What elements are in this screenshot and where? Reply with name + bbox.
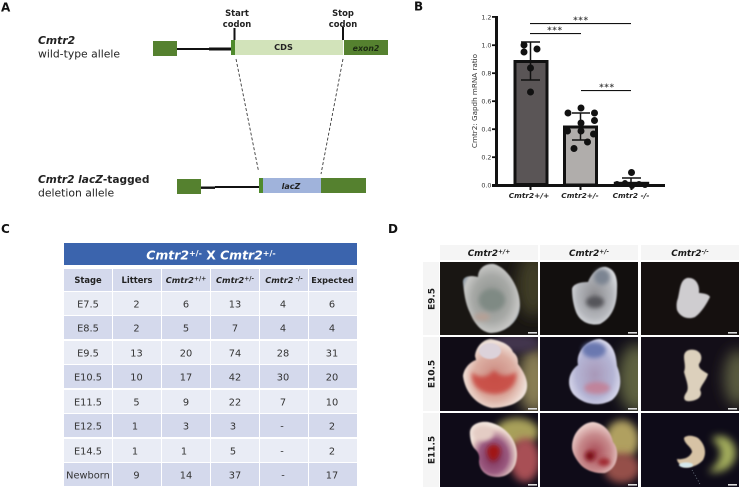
table body values: - <box>281 470 285 482</box>
row headers: E9.5 <box>428 288 438 310</box>
significance stars: *** <box>573 15 589 25</box>
table body values: E14.5 <box>74 446 102 458</box>
table body values: 5 <box>230 446 236 458</box>
row headers: E11.5 <box>428 436 438 464</box>
label: stop codon: Stop <box>332 8 354 18</box>
significance brackets <box>530 23 631 91</box>
panel letter C: C <box>1 222 10 236</box>
table body values: 7 <box>280 398 286 408</box>
deletion allele diagram <box>177 178 366 194</box>
table body values: 30 <box>277 372 289 384</box>
label: lacZ-tagged deletion allele: deletion allele <box>38 186 115 200</box>
table title bar <box>64 243 357 265</box>
panel letter A: A <box>1 0 11 14</box>
photo: E11.5 wild type <box>440 413 540 487</box>
table body values: 4 <box>280 300 286 310</box>
table body values: 2 <box>133 324 140 334</box>
table body values: 9 <box>133 470 140 482</box>
table column headers: Expected <box>311 275 354 285</box>
table body values: 10 <box>326 398 338 408</box>
table title bar: +/- <box>189 249 202 258</box>
table body values: 7 <box>232 324 238 334</box>
table title bar: +/- <box>263 249 276 258</box>
table body values: 10 <box>130 372 143 384</box>
table body values: Newborn <box>66 470 110 482</box>
table body values: E8.5 <box>77 324 99 334</box>
wild-type gene diagram: CDS <box>274 42 293 52</box>
bar: Cmtr2+/+ <box>515 62 547 184</box>
table body values: E9.5 <box>77 348 99 360</box>
column headers: +/+ <box>498 248 510 256</box>
photo: E9.5 null <box>641 262 739 335</box>
label: wild-type allele: Cmtr2 <box>38 34 75 47</box>
panel B: bar chart <box>414 0 665 200</box>
y axis with ticks: 0.6 <box>481 98 492 106</box>
table column headers: Cmtr2 <box>265 275 294 285</box>
table body values: E7.5 <box>77 300 99 310</box>
panel C: genotype table <box>1 222 357 486</box>
significance stars <box>547 15 615 92</box>
x axis labels: Cmtr2+/- <box>561 191 599 200</box>
label: wild-type allele: wild-type allele <box>38 48 120 60</box>
y axis with ticks <box>481 14 498 190</box>
table body values: 1 <box>132 446 138 458</box>
row headers: E10.5 <box>428 360 438 388</box>
table body values: 3 <box>230 422 236 432</box>
y axis title: Cmtr2: Gapdh mRNA ratio <box>470 54 479 148</box>
y axis with ticks: 0.2 <box>481 154 492 162</box>
x axis labels: Cmtr2 -/- <box>613 191 649 200</box>
table body values: 13 <box>229 300 241 310</box>
table body values: 1 <box>132 422 138 432</box>
label: start codon: Start <box>225 8 249 18</box>
x axis <box>492 184 665 190</box>
table body values: 6 <box>329 300 335 310</box>
x axis labels <box>509 191 649 200</box>
y axis with ticks: 1.0 <box>481 42 492 50</box>
table body values: - <box>280 446 284 458</box>
photo: E10.5 wild type <box>440 337 538 411</box>
table column headers: -/- <box>293 276 303 282</box>
table title bar: X <box>202 248 220 262</box>
table title bar: Cmtr2 <box>220 248 263 262</box>
wild-type gene diagram: exon2 <box>353 44 379 53</box>
wild-type gene diagram <box>153 27 388 56</box>
table body values: 5 <box>133 398 140 408</box>
table column headers: Litters <box>121 275 153 285</box>
photo: E10.5 null <box>641 337 740 411</box>
label: lacZ-tagged deletion allele: Cmtr2 lacZ-tagged <box>38 174 149 186</box>
table body values: E11.5 <box>74 398 102 408</box>
photo: E10.5 heterozygote <box>540 337 638 411</box>
deletion allele diagram: lacZ <box>282 182 301 191</box>
table body values: 22 <box>229 398 241 408</box>
y axis with ticks: 0.4 <box>481 126 492 134</box>
table body values: E12.5 <box>74 422 102 432</box>
table body values: 28 <box>277 348 289 360</box>
data points <box>520 42 648 189</box>
column headers: Cmtr2 <box>468 249 498 259</box>
significance stars: *** <box>547 25 563 35</box>
bar: Cmtr2+/- <box>564 127 596 185</box>
table body values <box>66 300 338 482</box>
table body values: 14 <box>180 470 192 482</box>
panel D: embryo photo grid <box>388 222 740 487</box>
table column headers: +/- <box>244 276 254 282</box>
photo: E11.5 null <box>641 413 739 487</box>
table body values: 2 <box>329 446 335 458</box>
y axis with ticks: 0.0 <box>481 182 492 190</box>
table body values: 9 <box>183 398 189 408</box>
column headers <box>440 245 739 260</box>
table body values: 5 <box>183 324 189 334</box>
column headers: Cmtr2 <box>569 249 599 259</box>
table cells backgrounds <box>64 269 357 486</box>
table body values: 20 <box>180 348 192 360</box>
y axis with ticks: 1.2 <box>481 14 492 22</box>
x axis labels: Cmtr2+/+ <box>509 191 549 200</box>
table body values: 37 <box>229 470 241 482</box>
column headers: Cmtr2 <box>671 249 702 259</box>
table body values: 1 <box>181 446 187 458</box>
error bars <box>521 42 641 187</box>
row headers <box>423 262 439 487</box>
table body values: 2 <box>133 300 140 310</box>
table column headers: +/+ <box>194 276 206 282</box>
panel A: allele schematic <box>1 0 388 200</box>
photo: E11.5 heterozygote <box>540 413 640 487</box>
table body values: 6 <box>183 300 189 310</box>
table column headers: Stage <box>74 275 102 285</box>
photo: E9.5 heterozygote <box>540 262 638 335</box>
dashed projection lines <box>236 59 343 174</box>
table body values: 17 <box>326 470 338 482</box>
table column headers: Cmtr2 <box>216 275 245 285</box>
table body values: - <box>280 422 284 432</box>
table body values: E10.5 <box>74 372 102 384</box>
table body values: 74 <box>229 348 241 360</box>
photo: E9.5 wild type <box>440 262 538 335</box>
table body values: 13 <box>130 348 143 360</box>
bar: Cmtr2-/- <box>615 183 648 185</box>
label: stop codon: codon <box>329 19 357 29</box>
significance stars: *** <box>599 82 615 92</box>
label: start codon: codon <box>223 19 251 29</box>
table body values: 4 <box>280 324 286 334</box>
table body values: 3 <box>183 422 189 432</box>
table column headers: Cmtr2 <box>166 275 194 285</box>
y axis with ticks: 0.8 <box>481 70 492 78</box>
table body values: 31 <box>326 348 338 360</box>
table title bar: Cmtr2 <box>146 248 189 262</box>
table body values: 17 <box>180 372 192 384</box>
panel letter D: D <box>388 222 398 236</box>
column headers: -/- <box>702 248 709 256</box>
table body values: 20 <box>326 372 338 384</box>
table column headers <box>74 275 354 285</box>
table body values: 2 <box>329 422 335 432</box>
table body values: 4 <box>329 324 335 334</box>
table body values: 42 <box>229 372 241 384</box>
column headers: +/- <box>599 248 610 256</box>
